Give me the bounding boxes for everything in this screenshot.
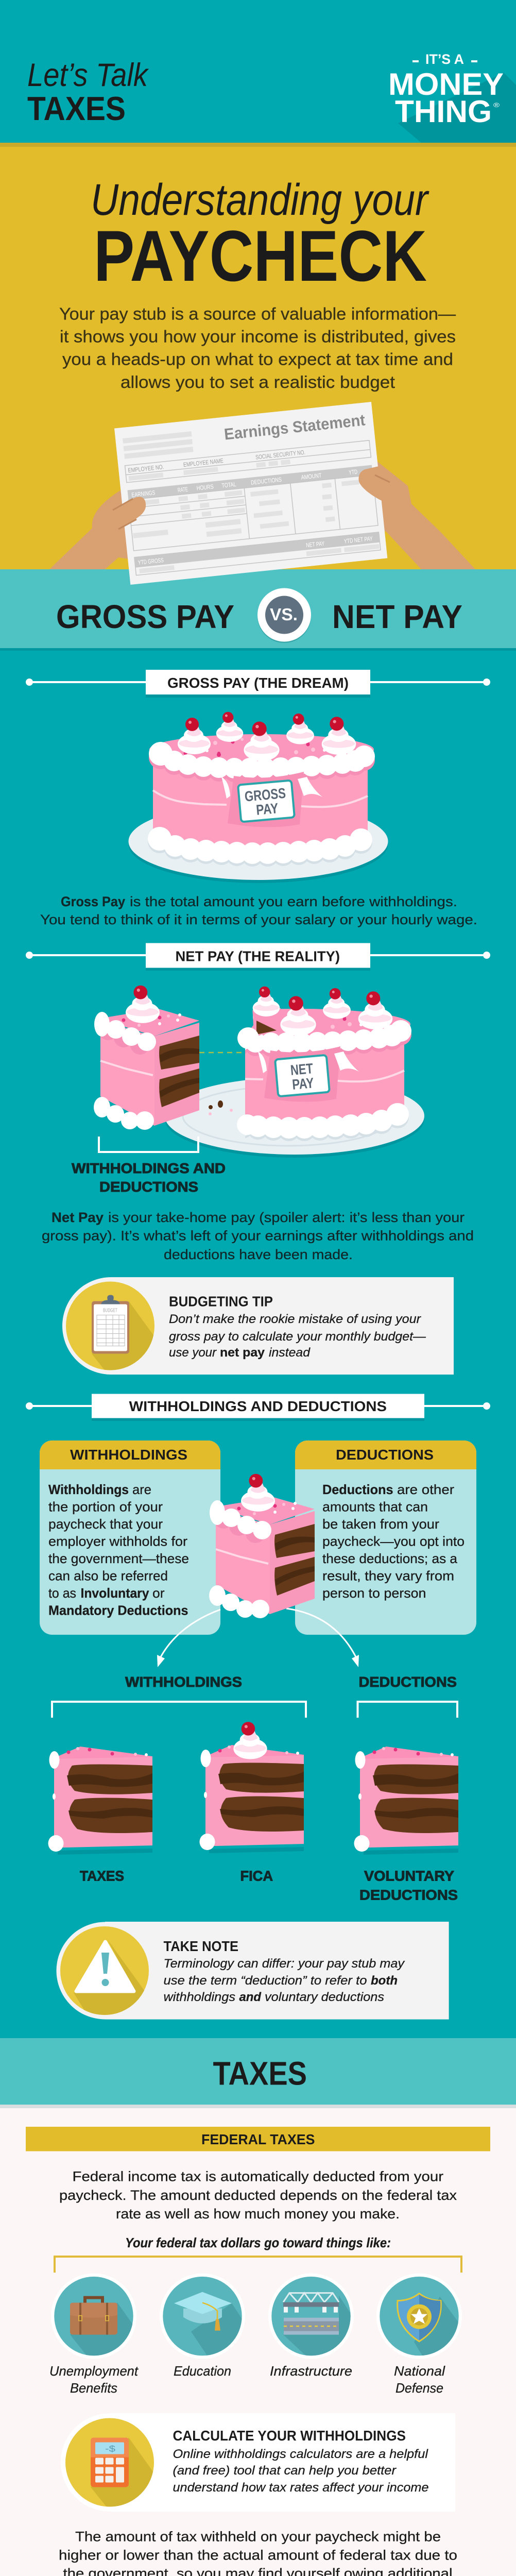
card: withholdings: Involuntary bbox=[80, 1585, 149, 1601]
icon: calculator bbox=[65, 2418, 154, 2507]
callout text: CALCULATE YOUR WITHHOLDINGS bbox=[173, 2428, 406, 2444]
earnings statement paper: DEDUCTIONS bbox=[251, 476, 282, 486]
slice: voluntary deductions: DEDUCTIONS bbox=[359, 1887, 458, 1903]
slice: voluntary deductions bbox=[354, 1747, 458, 1903]
earnings statement paper: EMPLOYEE NO. bbox=[128, 463, 164, 474]
intro paragraph: you a heads-up on what to expect at tax time and bbox=[62, 349, 453, 369]
illustration: cake with slice removed bbox=[94, 986, 424, 1158]
illustration: center cake slice bbox=[209, 1474, 315, 1618]
earnings statement paper: YTD NET PAY bbox=[343, 535, 373, 545]
heading: WITHHOLDINGS AND DEDUCTIONS bbox=[129, 1398, 387, 1414]
earnings statement paper: EARNINGS bbox=[131, 489, 156, 499]
gross pay description: is the total amount you earn before withholdings. bbox=[130, 894, 457, 909]
vs badge bbox=[257, 588, 311, 643]
note text: withholdings bbox=[164, 1990, 235, 2004]
header band bbox=[0, 0, 516, 143]
labels: withholdings and deductions: WITHHOLDINGS bbox=[125, 1674, 242, 1690]
title: PAYCHECK bbox=[94, 215, 427, 296]
band: gross pay vs net pay: GROSS PAY bbox=[56, 598, 234, 635]
card: withholdings: Mandatory Deductions bbox=[48, 1602, 188, 1618]
heading: federal taxes: FEDERAL TAXES bbox=[201, 2131, 315, 2147]
subheading: Your federal tax dollars go toward things like: bbox=[125, 2235, 391, 2250]
note text: voluntary deductions bbox=[265, 1990, 384, 2004]
earnings statement paper: TOTAL bbox=[221, 481, 236, 489]
federal paragraph: Federal income tax is automatically deducted from your bbox=[72, 2169, 443, 2184]
heading: gross pay (the dream): GROSS PAY (THE DREAM) bbox=[167, 675, 349, 691]
heading: gross pay (the dream) bbox=[26, 670, 490, 698]
federal paragraph: paycheck. The amount deducted depends on the federal tax bbox=[59, 2188, 457, 2203]
gross pay sign: PAY bbox=[255, 800, 279, 818]
label: national defense bbox=[394, 2363, 445, 2396]
slice: fica: FICA bbox=[240, 1868, 273, 1884]
card: deductions: these deductions; as a bbox=[322, 1551, 458, 1566]
net pay description: deductions have been made. bbox=[164, 1247, 353, 1262]
tip text bbox=[169, 1293, 426, 1360]
earnings statement paper: YTD GROSS bbox=[137, 556, 164, 566]
gross pay description bbox=[40, 894, 477, 927]
slice: fica bbox=[200, 1722, 304, 1884]
tip text: Don’t make the rookie mistake of using your bbox=[169, 1312, 421, 1326]
intro paragraph: it shows you how your income is distributed, gives bbox=[60, 327, 456, 346]
dashed cut line bbox=[199, 1052, 244, 1053]
icon: clipboard: BUDGET bbox=[103, 1308, 117, 1314]
callout text bbox=[173, 2428, 428, 2495]
logo: It's a Money Thing: MONEY bbox=[388, 67, 504, 101]
icon: calculator: -$ bbox=[105, 2444, 116, 2453]
logo: It's a Money Thing: THING bbox=[395, 94, 492, 129]
panel: net pay bbox=[26, 943, 490, 1262]
title bbox=[91, 175, 429, 296]
logo: It's a Money Thing bbox=[388, 52, 504, 129]
card: deductions: DEDUCTIONS bbox=[336, 1447, 434, 1463]
illustration: hands holding earnings statement bbox=[49, 402, 475, 585]
card: deductions: result, they vary from bbox=[322, 1568, 454, 1584]
icon: graduation cap, education bbox=[160, 2274, 245, 2359]
card: deductions: be taken from your bbox=[322, 1516, 439, 1532]
tip text: net pay bbox=[220, 1346, 265, 1360]
arrow: withholdings bbox=[157, 1609, 220, 1667]
card: deductions: are other bbox=[397, 1482, 454, 1497]
earnings statement paper: HOURS bbox=[196, 483, 214, 492]
bracket: deductions bbox=[357, 1702, 457, 1718]
note text: both bbox=[371, 1974, 398, 1988]
earnings statement paper: YTD bbox=[348, 468, 358, 476]
labels: withholdings and deductions bbox=[125, 1674, 457, 1690]
earnings statement paper: RATE bbox=[177, 485, 188, 494]
logo: It's a Money Thing: IT’S A bbox=[425, 52, 464, 67]
card: deductions: paycheck—you opt into bbox=[322, 1533, 465, 1549]
paragraph: tax withheld: The amount of tax withheld on your paycheck might be bbox=[75, 2529, 441, 2544]
net pay description: is your take-home pay (spoiler alert: it’s less than your bbox=[108, 1210, 465, 1225]
title: Understanding your bbox=[91, 175, 429, 225]
card: withholdings: to as bbox=[48, 1585, 76, 1601]
earnings statement paper: EMPLOYEE NAME bbox=[183, 457, 223, 468]
band: gross pay vs net pay: NET PAY bbox=[332, 598, 462, 635]
label: unemployment benefits: Benefits bbox=[70, 2380, 117, 2396]
icon: briefcase, unemployment benefits bbox=[51, 2274, 136, 2359]
band: gross pay vs net pay bbox=[0, 569, 516, 651]
logo: It's a Money Thing: ® bbox=[493, 101, 500, 109]
card: withholdings: the government—these bbox=[48, 1551, 189, 1566]
note text: TAKE NOTE bbox=[164, 1938, 238, 1954]
bracket: withholdings bbox=[52, 1702, 306, 1718]
vs badge: VS. bbox=[270, 605, 298, 624]
federal paragraph bbox=[59, 2169, 457, 2222]
net pay sign bbox=[275, 1055, 330, 1096]
callout text: (and free) tool that can help you better bbox=[173, 2464, 397, 2478]
card: withholdings: can also be referred bbox=[48, 1568, 168, 1584]
banner: taxes: TAXES bbox=[213, 2055, 307, 2092]
card: withholdings: Withholdings bbox=[48, 1482, 129, 1497]
callout: calculate your withholdings bbox=[61, 2413, 455, 2514]
note text: Terminology can differ: your pay stub may bbox=[164, 1957, 405, 1971]
label: education: Education bbox=[174, 2363, 231, 2379]
panel: yellow hero bbox=[0, 143, 516, 569]
icon: shield, national defense bbox=[376, 2274, 462, 2359]
card: deductions: Deductions bbox=[322, 1482, 393, 1497]
note text bbox=[164, 1938, 405, 2004]
card: withholdings: are bbox=[132, 1482, 151, 1497]
heading: federal taxes bbox=[26, 2127, 490, 2151]
callout: take note bbox=[57, 1922, 449, 2022]
slice: voluntary deductions: VOLUNTARY bbox=[364, 1868, 454, 1884]
earnings statement paper: NET PAY bbox=[306, 540, 325, 549]
arrow: deductions bbox=[286, 1608, 359, 1667]
earnings statement paper bbox=[114, 402, 387, 585]
removed slice bbox=[94, 986, 199, 1130]
bracket: withholdings and deductions bbox=[99, 1137, 198, 1152]
slice caption bbox=[72, 1160, 226, 1195]
gross pay sign bbox=[238, 781, 295, 822]
net pay sign: NET bbox=[290, 1060, 314, 1078]
tip text: gross pay to calculate your monthly budget— bbox=[169, 1330, 426, 1344]
intro paragraph: Your pay stub is a source of valuable information— bbox=[59, 304, 456, 324]
card: withholdings: paycheck that your bbox=[48, 1516, 163, 1532]
card: withholdings: or bbox=[152, 1585, 165, 1601]
note text: use the term “deduction” to refer to bbox=[164, 1974, 367, 1988]
series title: TAXES bbox=[27, 90, 126, 127]
slice: taxes: TAXES bbox=[80, 1868, 124, 1884]
gross pay description: Gross Pay bbox=[61, 894, 125, 909]
gross pay sign: GROSS bbox=[244, 785, 286, 805]
heading: net pay (the reality): NET PAY (THE REALITY) bbox=[175, 948, 340, 964]
card: withholdings: employer withholds for bbox=[48, 1533, 187, 1549]
label: infrastructure: Infrastructure bbox=[270, 2363, 352, 2379]
tip text: BUDGETING TIP bbox=[169, 1293, 273, 1310]
series title: Let’s Talk bbox=[27, 57, 149, 93]
bracket bbox=[55, 2257, 461, 2273]
heading: net pay (the reality) bbox=[26, 943, 490, 971]
icon: warning triangle bbox=[60, 1926, 149, 2015]
card: withholdings bbox=[40, 1440, 220, 1635]
section background: cream bbox=[0, 2105, 516, 2576]
paragraph: tax withheld bbox=[59, 2529, 457, 2576]
panel: gross pay bbox=[26, 670, 490, 927]
card: deductions: person to person bbox=[322, 1585, 426, 1601]
right thumb bbox=[358, 466, 397, 502]
earnings statement paper: Earnings Statement bbox=[223, 411, 366, 444]
slice caption: WITHHOLDINGS AND bbox=[72, 1160, 226, 1176]
paragraph: tax withheld: higher or lower than the actual amount of federal tax due to bbox=[59, 2547, 457, 2563]
series title bbox=[27, 57, 149, 127]
panel: withholdings and deductions bbox=[26, 1394, 490, 1903]
slice: taxes bbox=[48, 1747, 152, 1884]
illustration: whole cake bbox=[129, 712, 388, 883]
left thumb bbox=[114, 497, 146, 529]
labels: withholdings and deductions: DEDUCTIONS bbox=[358, 1674, 457, 1690]
label: national defense: National bbox=[394, 2363, 445, 2379]
card: withholdings: the portion of your bbox=[48, 1499, 163, 1514]
federal paragraph: rate as well as how much money you make. bbox=[116, 2206, 400, 2222]
right arm and hand bbox=[360, 462, 475, 569]
intro paragraph bbox=[59, 304, 456, 392]
card: deductions: amounts that can bbox=[322, 1499, 428, 1514]
callout: budgeting tip bbox=[62, 1277, 454, 1378]
net pay sign: PAY bbox=[291, 1075, 315, 1093]
note text: and bbox=[239, 1990, 262, 2004]
icon: bridge, infrastructure bbox=[268, 2274, 354, 2359]
net pay description: gross pay). It’s what’s left of your earnings after withholdings and bbox=[42, 1228, 474, 1244]
logo long shadow bbox=[398, 73, 516, 143]
banner: taxes bbox=[0, 2038, 516, 2108]
label: unemployment benefits: Unemployment bbox=[49, 2363, 139, 2379]
earnings statement paper: SOCIAL SECURITY NO. bbox=[255, 449, 305, 461]
earnings statement paper: AMOUNT bbox=[301, 472, 322, 481]
tip text: instead bbox=[269, 1346, 311, 1360]
label: national defense: Defense bbox=[395, 2380, 443, 2396]
intro paragraph: allows you to set a realistic budget bbox=[121, 372, 395, 392]
net pay description bbox=[42, 1210, 474, 1262]
icon: clipboard bbox=[66, 1282, 154, 1370]
card: withholdings: WITHHOLDINGS bbox=[70, 1447, 187, 1463]
left arm and hand bbox=[49, 484, 135, 569]
card: deductions bbox=[295, 1440, 476, 1635]
slice caption: DEDUCTIONS bbox=[99, 1179, 198, 1195]
panel: federal taxes bbox=[26, 2127, 490, 2396]
callout text: Online withholdings calculators are a helpful bbox=[173, 2447, 428, 2461]
tip text: use your bbox=[169, 1346, 217, 1360]
callout text: understand how tax rates affect your income bbox=[173, 2481, 428, 2495]
gross pay description: You tend to think of it in terms of your salary or your hourly wage. bbox=[40, 912, 477, 927]
label: unemployment benefits bbox=[49, 2363, 139, 2396]
heading bbox=[26, 1394, 490, 1421]
net pay description: Net Pay bbox=[51, 1210, 104, 1225]
